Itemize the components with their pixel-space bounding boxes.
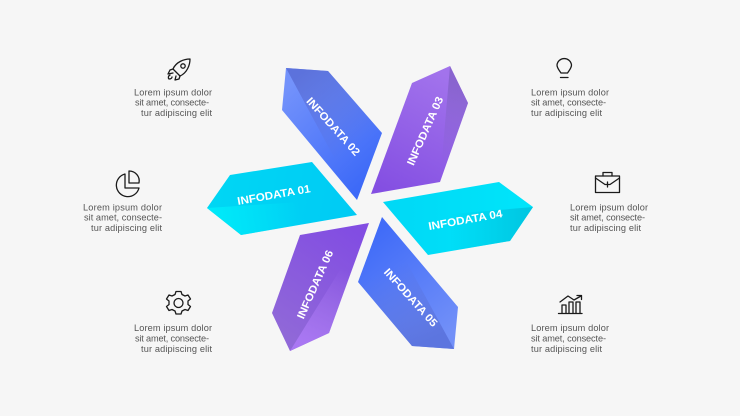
icon: briefcase bbox=[596, 172, 620, 192]
text block: bottom left: sit amet, consecte- bbox=[135, 334, 209, 344]
icon: light bulb bbox=[557, 59, 572, 78]
text block: top right: tur adipiscing elit bbox=[531, 108, 602, 118]
text block: bottom left bbox=[134, 323, 212, 354]
text block: middle left: tur adipiscing elit bbox=[91, 223, 162, 233]
arrow segment: INFODATA 03: INFODATA 03 bbox=[405, 95, 446, 168]
text block: bottom right bbox=[531, 323, 609, 354]
text block: middle left: sit amet, consecte- bbox=[84, 212, 162, 222]
arrow segment: INFODATA 06: INFODATA 06 bbox=[295, 249, 336, 321]
text block: bottom right: Lorem ipsum dolor bbox=[531, 323, 609, 333]
arrow segment: INFODATA 03 bbox=[371, 66, 468, 194]
arrow segment: INFODATA 05: INFODATA 05 bbox=[381, 266, 439, 330]
arrow segment: INFODATA 01 bbox=[207, 162, 357, 235]
text block: bottom left: tur adipiscing elit bbox=[141, 344, 212, 354]
text block: middle left bbox=[83, 202, 162, 233]
text block: top right bbox=[531, 88, 609, 118]
icon: gear bbox=[166, 292, 190, 314]
text block: top left: tur adipiscing elit bbox=[141, 108, 212, 118]
text block: middle left: Lorem ipsum dolor bbox=[83, 202, 162, 212]
arrow segment: INFODATA 01: INFODATA 01 bbox=[236, 183, 311, 208]
text block: top left bbox=[134, 88, 212, 118]
text block: bottom right: tur adipiscing elit bbox=[531, 344, 602, 354]
text block: top left: sit amet, consecte- bbox=[135, 98, 209, 108]
text block: middle right bbox=[570, 202, 648, 233]
text block: top left: Lorem ipsum dolor bbox=[134, 88, 212, 98]
arrow segment: INFODATA 04 bbox=[383, 182, 533, 255]
text block: middle right: tur adipiscing elit bbox=[570, 223, 641, 233]
arrow segment: INFODATA 02 bbox=[282, 68, 382, 200]
icon: rocket bbox=[168, 59, 190, 80]
text block: middle right: sit amet, consecte- bbox=[570, 212, 645, 222]
icon: pie chart bbox=[116, 171, 139, 197]
icon: bar chart with rising arrow bbox=[558, 296, 582, 314]
text block: middle right: Lorem ipsum dolor bbox=[570, 202, 648, 212]
arrow segment: INFODATA 06 bbox=[272, 223, 369, 351]
text block: top right: Lorem ipsum dolor bbox=[531, 88, 609, 98]
text block: bottom right: sit amet, consecte- bbox=[531, 334, 606, 344]
arrow segment: INFODATA 04: INFODATA 04 bbox=[428, 208, 504, 233]
arrow segment: INFODATA 02: INFODATA 02 bbox=[304, 95, 362, 159]
text block: top right: sit amet, consecte- bbox=[531, 98, 606, 108]
text block: bottom left: Lorem ipsum dolor bbox=[134, 323, 212, 333]
arrow segment: INFODATA 05 bbox=[358, 217, 458, 349]
